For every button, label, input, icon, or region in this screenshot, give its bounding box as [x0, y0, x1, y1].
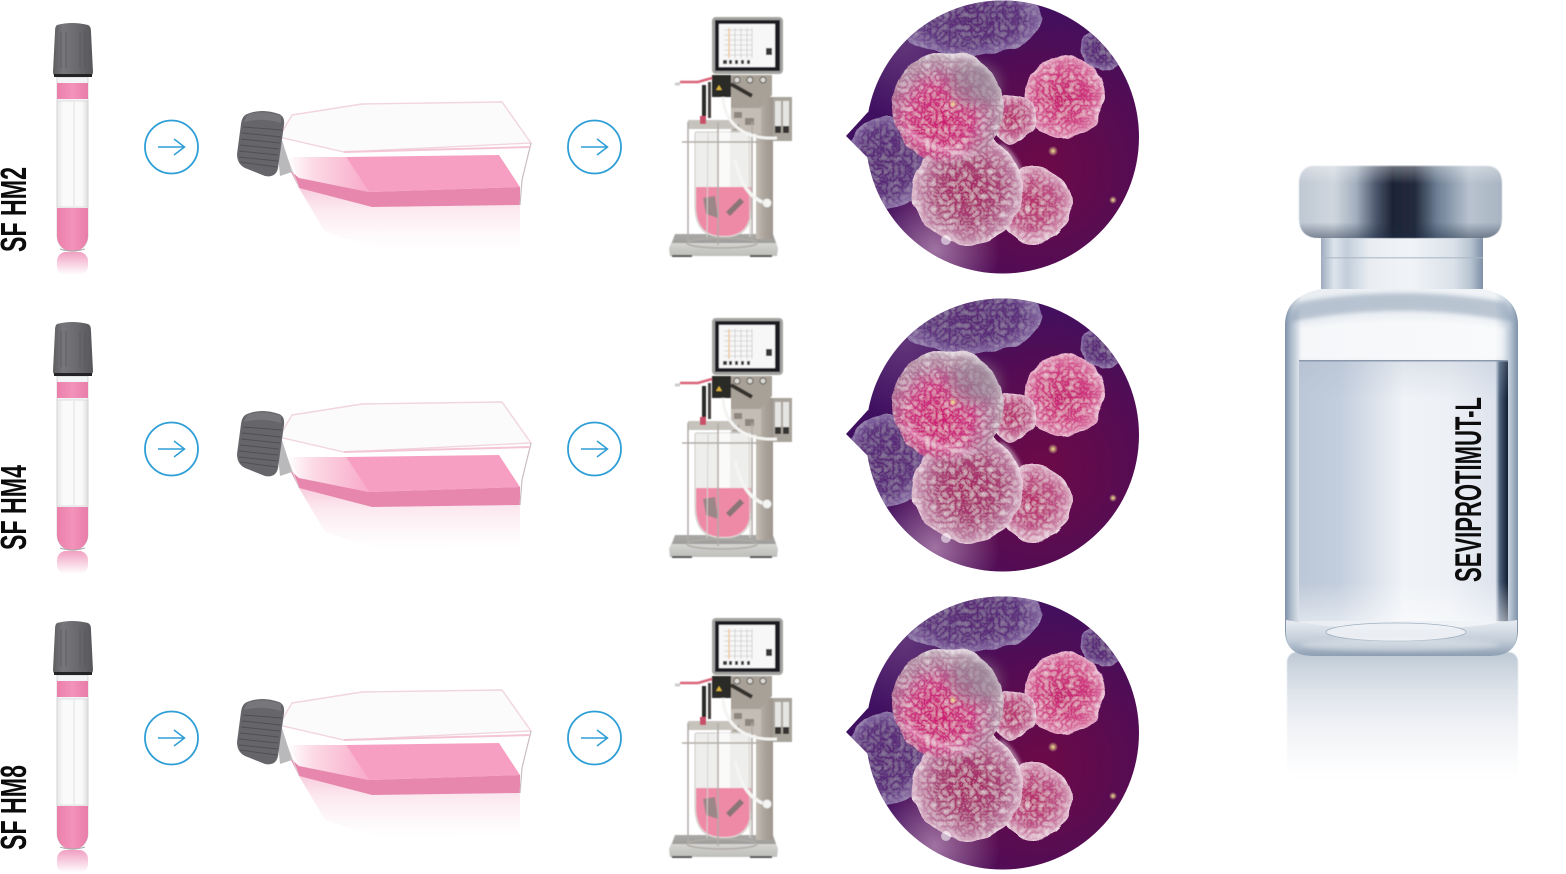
arrow: [568, 120, 621, 174]
vial: Seviprotimut-L: [1285, 166, 1518, 782]
arrow: [568, 422, 621, 476]
icon: blood tube: [53, 322, 93, 574]
label: SEVIPROTIMUT-L: SEVIPROTIMUT-L: [1448, 397, 1489, 582]
row: SF HM2: [0, 0, 1145, 315]
illustration: tumor cells: [830, 268, 1145, 613]
icon: blood tube: [53, 621, 93, 873]
icon: bioreactor: [669, 318, 792, 558]
illustration: tumor cells: [830, 0, 1145, 315]
arrow: [145, 422, 198, 476]
arrow: [568, 712, 621, 764]
icon: culture flask: [237, 102, 531, 250]
icon: bioreactor: [669, 618, 792, 858]
arrow: [145, 120, 198, 174]
icon: blood tube: [53, 23, 93, 275]
row: SF HM4: [0, 268, 1145, 613]
icon: bioreactor: [669, 17, 792, 257]
icon: culture flask: [237, 690, 531, 838]
row: SF HM8: [0, 566, 1145, 874]
icon: culture flask: [237, 402, 531, 550]
arrow: [145, 712, 198, 764]
illustration: tumor cells: [830, 566, 1145, 874]
